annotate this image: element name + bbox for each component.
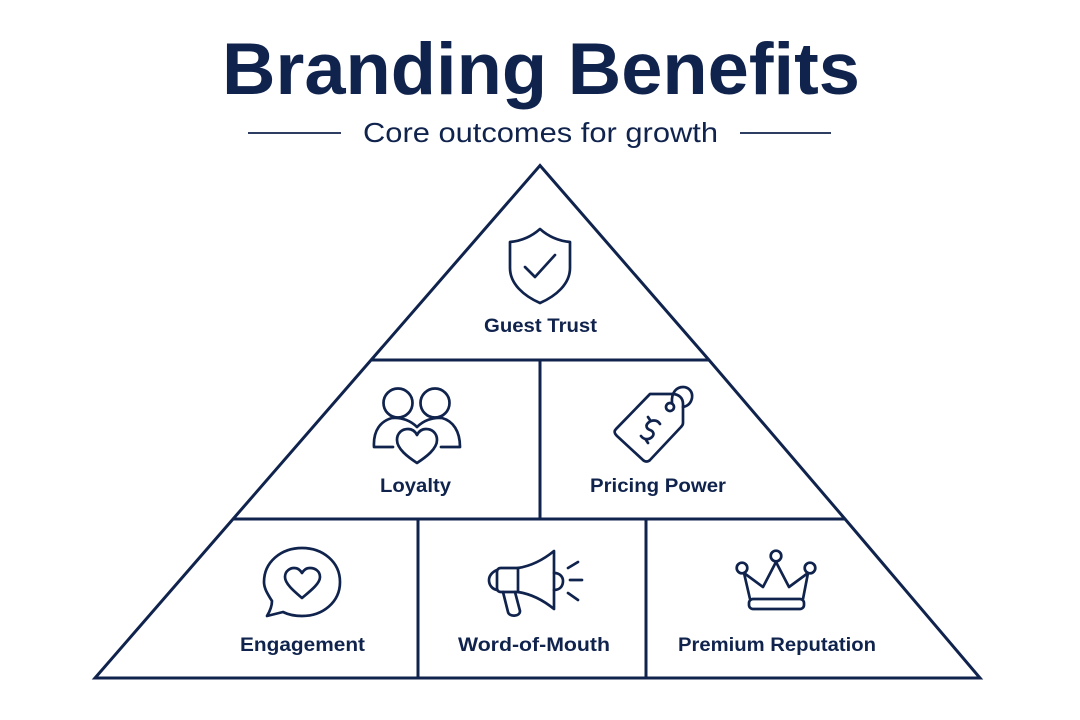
subtitle with rules: Core outcomes for growth	[363, 117, 718, 148]
panel: loyalty	[374, 388, 460, 497]
panel: premium reputation	[678, 551, 876, 656]
panel: pricing power	[590, 387, 727, 497]
icon: shield with check	[510, 229, 570, 303]
label: pricing power: Pricing Power	[590, 476, 727, 497]
label: premium reputation: Premium Reputation	[678, 635, 876, 656]
title: Branding Benefits	[222, 29, 860, 110]
icon: two people with heart	[374, 388, 460, 463]
label: engagement: Engagement	[240, 635, 366, 656]
panel: engagement	[240, 548, 366, 656]
label: guest trust: Guest Trust	[484, 316, 598, 337]
pyramid	[95, 166, 980, 678]
label: word-of-mouth: Word-of-Mouth	[458, 635, 610, 656]
pyramid outline	[95, 166, 980, 678]
icon: speech bubble with heart	[264, 548, 340, 616]
pyramid tier dividers	[233, 360, 845, 678]
icon: price tag	[615, 387, 692, 462]
icon: megaphone	[489, 551, 582, 616]
panel: guest trust	[484, 229, 598, 337]
panel: word-of-mouth	[458, 551, 610, 656]
label: loyalty: Loyalty	[380, 476, 451, 497]
icon: crown	[737, 551, 815, 609]
